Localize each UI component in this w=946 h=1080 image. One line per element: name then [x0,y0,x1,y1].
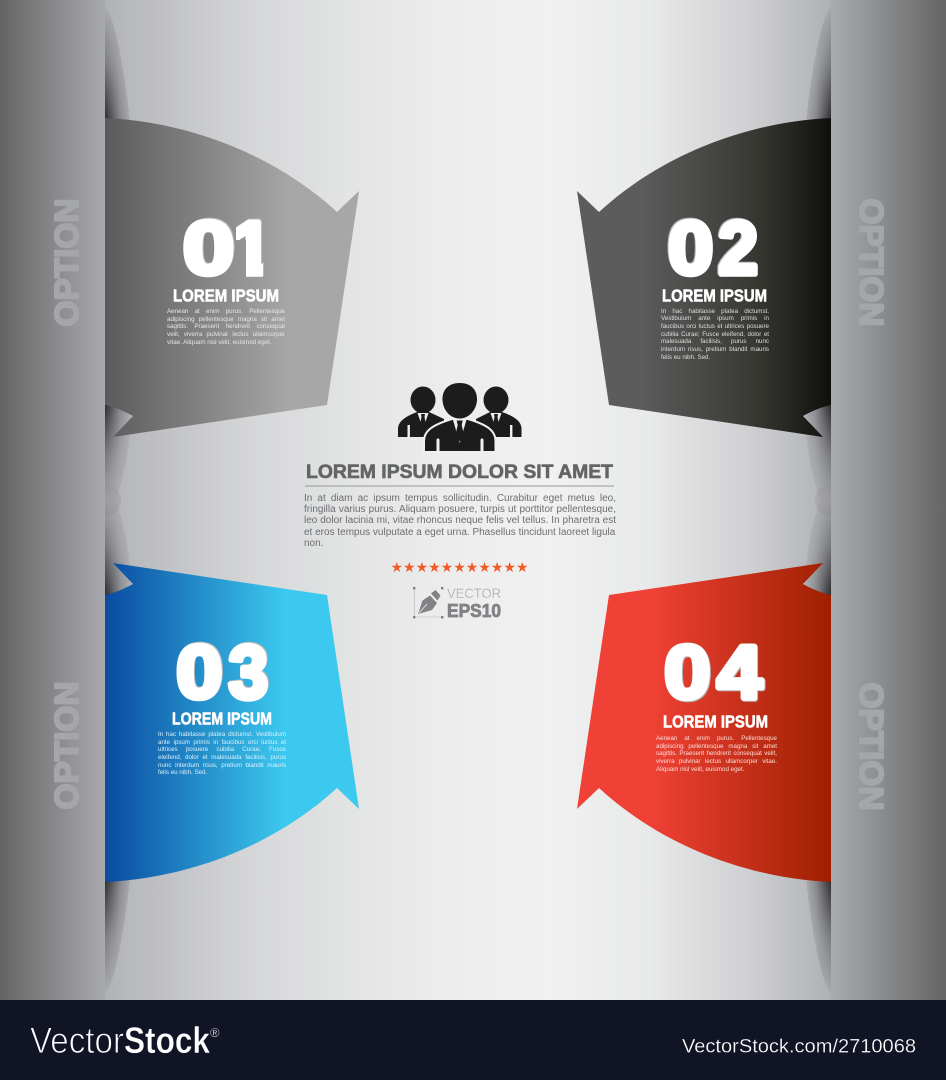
main title: LOREM IPSUM DOLOR SIT AMET [306,462,613,483]
number 02: 2 [718,205,757,289]
logo: Vector [30,1020,124,1061]
number 04: 0 [664,630,710,714]
text 04: viverra pulvinar lectus ullamcorper vitae. [656,758,777,765]
logo: Stock [124,1020,210,1061]
text 02: felis eu nibh. Sed. [661,354,710,361]
text 04: adipiscing pellentesque magna sit amet [656,743,777,750]
number 02 [667,205,758,290]
panel: 03 blue [105,563,359,882]
text 03: ultrices posuere cubilia Curae; Fusce [158,746,286,753]
number 01: 0 [184,205,235,289]
text 02: cubilia Curae; Fusce eleifend, dolor et [661,331,769,338]
text 03: eleifend, dolor et malesuada facilisis, purus [158,754,286,761]
number 03: 0 [177,629,223,713]
number 03: 3 [228,630,268,714]
text 01: sagittis. Praesent hendrerit consequat [167,323,285,330]
number 04: 4 [717,630,762,714]
text 03: ante ipsum primis in faucibus orci luctus et [158,739,286,746]
label: option upper left: OPTION [48,199,85,326]
text 02: malesuada facilisis, purus nunc [661,338,769,345]
text 02: faucibus orci luctus et ultrices posuere [661,323,769,330]
number 02: 0 [668,206,713,290]
number 01 [183,218,264,278]
text 01: Aenean at enim purus. Pellentesque [167,308,285,315]
main paragraph: non. [304,538,323,549]
heading 04: LOREM IPSUM [663,712,768,732]
url: VectorStock.com/2710068 [682,1036,916,1058]
number 03 [176,629,269,714]
main paragraph: In at diam ac ipsum tempus sollicitudin. Curabitur eget metus leo, [304,492,616,504]
heading 03: LOREM IPSUM [172,708,272,728]
text 03: In hac habitasse platea dictumst. Vestibulum [158,731,286,738]
text 02: Vestibulum ante ipsum primis in [661,315,769,322]
text 01: adipiscing pellentesque magna sit amet [167,316,285,323]
text 01: vitae. Aliquam nisl velit, euismod eget. [167,339,272,346]
centre person [424,383,496,452]
number 04 [664,630,763,715]
right side bar [831,0,946,1000]
text 04 [656,735,777,775]
main paragraph: fringilla varius purus. Aliquam posuere, turpis ut porttitor pellentesque, [304,504,616,515]
panel: 04 red [577,563,831,882]
number 02: 0 [667,205,712,289]
text 02 [661,308,769,364]
eps10 label: EPS10 [447,600,501,621]
number 04: 0 [665,631,711,715]
label: option upper right: OPTION [853,198,890,326]
fold shadows [89,6,847,994]
panel: 01 grey [105,118,359,437]
number 04: 4 [718,631,763,715]
number 01: 1 [231,206,272,290]
left person [398,386,444,437]
text 03: felis eu nibh. Sed. [158,769,207,776]
vector eps10 badge [413,585,501,621]
text 04: Aliquam nisl velit, euismod eget. [656,766,744,773]
number 02: 2 [718,206,758,290]
star rating row: ★★★★★★★★★★★ [390,560,528,576]
text 04: sagittis. Praesent hendrerit consequat velit, [656,750,777,757]
text 04: Aenean at enim purus. Pellentesque [656,735,777,742]
main paragraph [304,492,616,550]
left side bar [0,0,105,1000]
text 02: In hac habitasse platea dictumst. [661,308,769,314]
vector label: VECTOR [447,585,501,601]
main paragraph: et eros tempus vulputate a eget urna. Phasellus tincidunt laoreet ligula, [304,527,616,538]
icon: pen tool [413,587,443,618]
number 03: 3 [230,629,269,713]
number 03: 0 [176,630,222,714]
logo: ® [210,1025,220,1040]
text 03 [158,731,286,779]
main paragraph: leo dolor lacinia mi, vitae rhoncus neque felis vel tellus. In pharetra est [304,515,616,526]
logo [30,1020,220,1061]
text 01 [167,308,285,348]
icon: business team [398,383,522,452]
text 01: velit, viverra pulvinar lectus ullamcorper [167,331,285,338]
right person [476,386,522,437]
text 02: interdum risus, pretium blandit mauris [661,346,769,353]
text 03: nunc interdum risus, pretium blandit mauris [158,762,286,769]
number 01: 1 [232,205,273,289]
label: option lower right: OPTION [853,682,890,810]
number 01: 0 [183,206,234,290]
label: option lower left: OPTION [48,682,85,810]
heading 01: LOREM IPSUM [173,286,279,306]
heading 02: LOREM IPSUM [662,286,767,306]
panel: 02 dark [577,118,831,437]
footer bar [0,1000,946,1080]
